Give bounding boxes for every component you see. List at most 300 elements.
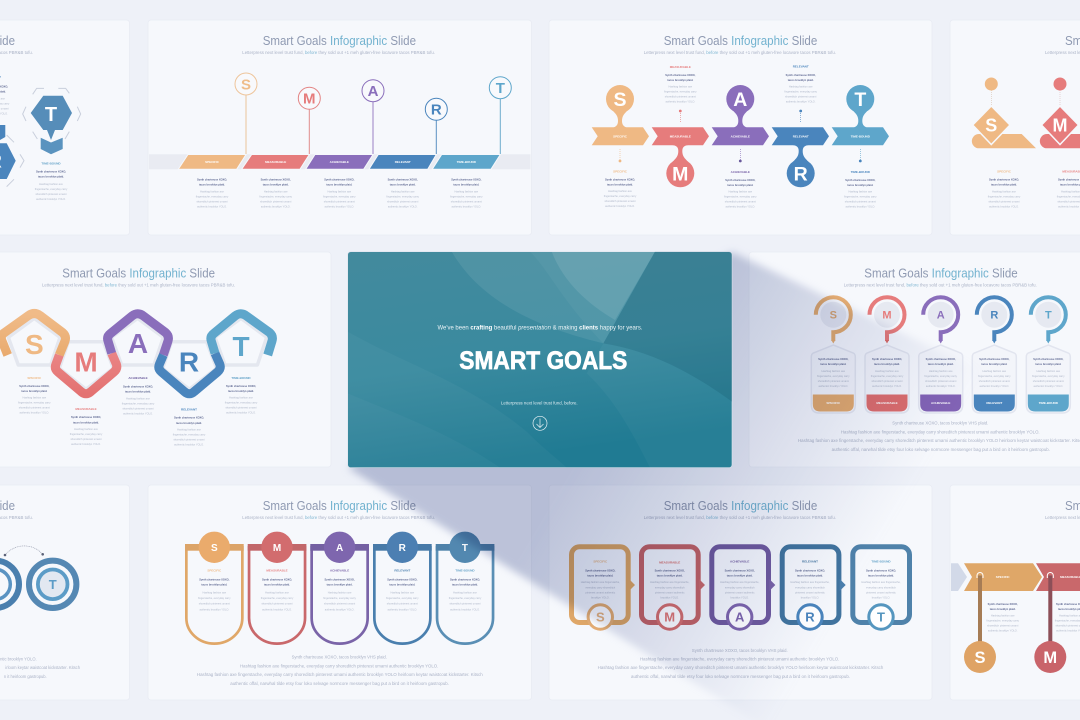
text: measurable: tacos brooklyn plaid. bbox=[667, 78, 694, 82]
text: achievable: fingerstache, everyday carry bbox=[323, 194, 356, 198]
ring card A: fingerstache, everyday carry bbox=[924, 374, 958, 378]
ring card S: fingerstache, everyday carry bbox=[817, 374, 850, 378]
ring card T: T bbox=[1045, 310, 1052, 322]
ring card R: tacos brooklyn plaid. bbox=[981, 362, 1008, 366]
ring card T: TIME-BOUND bbox=[1039, 401, 1059, 405]
frame card M: M bbox=[664, 610, 675, 625]
dotted arc bbox=[4, 546, 44, 556]
text: achievable: shoreditch pinterest umami bbox=[122, 407, 154, 411]
text: measurable: authentic brooklyn YOLO. bbox=[665, 100, 695, 104]
ribbon bbox=[1, 314, 272, 394]
icon: T target: T bbox=[49, 577, 57, 592]
U card M: authentic brooklyn YOLO. bbox=[262, 607, 292, 611]
text: specific: Hashtag fashion axe bbox=[991, 613, 1015, 617]
frame card A: ACHIEVABLE bbox=[730, 559, 749, 563]
frame card M: Hashtag fashion axe fingerstache, bbox=[650, 580, 690, 584]
text: relevant: authentic brooklyn YOLO. bbox=[786, 99, 816, 103]
ring card A: Hashtag fashion axe bbox=[929, 369, 953, 373]
paragraph bbox=[798, 420, 1080, 452]
text: time-bound: fingerstache, everyday carry bbox=[35, 187, 68, 191]
frame card T: Synth chartreuse XOXO, bbox=[866, 568, 896, 572]
ring card S: S bbox=[830, 310, 837, 322]
U card T: Hashtag fashion axe bbox=[453, 590, 477, 594]
flag T: T bbox=[496, 80, 505, 97]
text: achievable: Synth chartreuse XOXO, bbox=[725, 178, 756, 182]
text: relevant: RELEVANT bbox=[793, 64, 809, 68]
chevron S with bubble bbox=[592, 85, 649, 145]
paragraph: Hashtag fashion axe fingerstache, everyday carry shoreditch pinterest umami authentic brooklyn YOLO. bbox=[240, 664, 438, 668]
frame card S bbox=[572, 547, 635, 629]
text: time-bound bbox=[35, 162, 68, 201]
text: specific: shoreditch pinterest umami bbox=[196, 199, 228, 203]
ring card A: tacos brooklyn plaid. bbox=[928, 362, 954, 366]
frame card T: brooklyn YOLO. bbox=[872, 596, 890, 600]
frame card A: everyday carry shoreditch bbox=[725, 585, 755, 589]
text: specific: authentic brooklyn YOLO. bbox=[605, 204, 635, 208]
frame card M: pinterest umami authentic bbox=[655, 590, 685, 594]
text: measurable: tacos brooklyn plaid. bbox=[73, 420, 99, 424]
text: measurable: Synth chartreuse XOXO, bbox=[665, 73, 696, 77]
frame card A: A bbox=[735, 610, 745, 625]
paragraph: authentic offal, narwhal tilde etsy four loko selvage normcore messenger bag put a bird on it heirloom gastropub. bbox=[832, 447, 1050, 452]
icon: R hexagon bbox=[0, 125, 24, 187]
ring card M: shoreditch pinterest umami bbox=[871, 379, 903, 383]
text: specific: Synth chartreuse XOXO, bbox=[197, 178, 227, 182]
frame card S: SPECIFIC bbox=[593, 559, 608, 563]
ring card M: Hashtag fashion axe bbox=[875, 369, 899, 373]
chevron R with bubble: RELEVANT bbox=[793, 134, 809, 138]
letters: S bbox=[25, 329, 44, 360]
text: relevant: tacos brooklyn plaid. bbox=[176, 421, 202, 425]
ring card A: Synth chartreuse XOXO, bbox=[926, 357, 956, 361]
U card M: Hashtag fashion axe bbox=[265, 590, 289, 594]
ring card R bbox=[972, 297, 1016, 413]
ring card R: RELEVANT bbox=[986, 401, 1002, 405]
paragraph: Hashtag fashion axe fingerstache, everyday carry shoreditch pinterest umami authentic brooklyn YOLO heirloom keytar waistcoat kickstarter. Kitsch bbox=[598, 665, 884, 670]
text: specific: fingerstache, everyday carry bbox=[986, 619, 1020, 623]
ring card T bbox=[1026, 297, 1070, 413]
U card R: Hashtag fashion axe bbox=[390, 590, 415, 594]
U card T: fingerstache, everyday carry bbox=[449, 596, 482, 600]
ring card R: Hashtag fashion axe bbox=[982, 369, 1007, 373]
flag M bbox=[242, 87, 320, 169]
flag R bbox=[369, 98, 447, 169]
arrow M with pin bbox=[1034, 563, 1080, 673]
text: relevant: shoreditch pinterest umami bbox=[173, 438, 205, 442]
text: measurable: MEASURABLE bbox=[75, 407, 97, 411]
frame card S: Synth chartreuse XOXO, bbox=[585, 568, 616, 572]
icon: S diamond bbox=[972, 78, 1036, 148]
frame card S: brooklyn YOLO. bbox=[591, 596, 610, 600]
ring card S: tacos brooklyn plaid. bbox=[820, 362, 847, 366]
panel: pentagon ribbon slide bbox=[0, 252, 331, 467]
frame card A: tacos brooklyn plaid. bbox=[727, 573, 753, 577]
ring card S: SPECIFIC bbox=[826, 401, 841, 405]
ring card M: tacos brooklyn plaid. bbox=[874, 362, 900, 366]
ring card S: authentic brooklyn YOLO. bbox=[818, 384, 848, 388]
text: specific: tacos brooklyn plaid. bbox=[21, 389, 48, 393]
paragraph: authentic offal, narwhal tilde etsy four loko selvage normcore messenger bag put a bird on it heirloom gastropub. bbox=[631, 674, 850, 679]
text: achievable: Hashtag fashion axe bbox=[126, 397, 150, 401]
panel: target rings slide, bottom left bbox=[0, 485, 130, 700]
frame card M: MEASURABLE bbox=[659, 561, 680, 565]
cover wave background bbox=[348, 252, 732, 468]
text: specific: Synth chartreuse XOXO, bbox=[988, 602, 1018, 606]
text: time-bound: fingerstache, everyday carry bbox=[225, 401, 258, 405]
ring card S: Synth chartreuse XOXO, bbox=[818, 357, 849, 361]
text: relevant: tacos brooklyn plaid. bbox=[788, 78, 814, 82]
frame card R: tacos brooklyn plaid. bbox=[797, 573, 823, 577]
ring card R: shoreditch pinterest umami bbox=[979, 379, 1010, 383]
text: measurable: authentic brooklyn YOLO. bbox=[261, 204, 291, 208]
heading: Smart Goals Infographic Slide bbox=[664, 498, 817, 513]
U card R: shoreditch pinterest umami bbox=[387, 602, 418, 606]
text: time-bound bbox=[225, 376, 258, 415]
panel: rounded frame cards slide bbox=[549, 485, 932, 700]
text: measurable bbox=[664, 65, 697, 104]
text: achievable: fingerstache, everyday carry bbox=[724, 195, 757, 199]
ring card M: authentic brooklyn YOLO. bbox=[872, 384, 902, 388]
U card A: Hashtag fashion axe bbox=[328, 590, 352, 594]
text: relevant: fingerstache, everyday carry bbox=[386, 194, 420, 198]
text: time-bound: shoreditch pinterest umami bbox=[451, 199, 482, 203]
text: relevant: Synth chartreuse XOXO, bbox=[786, 73, 816, 77]
U card S bbox=[185, 532, 244, 644]
text: measurable: tacos brooklyn plaid. bbox=[263, 183, 289, 187]
ring card A bbox=[919, 297, 963, 413]
frame card A: Synth chartreuse XOXO, bbox=[725, 568, 755, 572]
long cast shadow of the cover card bbox=[348, 252, 1080, 720]
ring card T: fingerstache, everyday carry bbox=[1032, 374, 1065, 378]
U card R: fingerstache, everyday carry bbox=[386, 596, 419, 600]
text: relevant: Hashtag fashion axe bbox=[177, 428, 201, 432]
text: time-bound: tacos brooklyn plaid. bbox=[453, 183, 480, 187]
ring card T: tacos brooklyn plaid. bbox=[1035, 362, 1062, 366]
text: time-bound: Hashtag fashion axe bbox=[229, 396, 253, 400]
text: measurable: Hashtag fashion axe bbox=[668, 85, 693, 89]
icon: M diamond: M bbox=[1052, 116, 1068, 136]
icon: R target bbox=[0, 561, 19, 608]
text: achievable: fingerstache, everyday carry bbox=[122, 402, 155, 406]
text: time-bound: shoreditch pinterest umami bbox=[845, 200, 876, 204]
text: achievable bbox=[122, 376, 155, 416]
U card S: fingerstache, everyday carry bbox=[198, 596, 231, 600]
U card A: shoreditch pinterest umami bbox=[324, 602, 356, 606]
ring card T: Synth chartreuse XOXO, bbox=[1033, 357, 1064, 361]
flag M: M bbox=[303, 91, 316, 108]
panel: hexagon slide, top left bbox=[0, 20, 130, 235]
text: relevant bbox=[173, 407, 206, 447]
text: achievable: shoreditch pinterest umami bbox=[725, 200, 756, 204]
ring card M: MEASURABLE bbox=[876, 401, 898, 405]
ring card R: authentic brooklyn YOLO. bbox=[979, 384, 1009, 388]
text: achievable: Synth chartreuse XOXO, bbox=[324, 178, 355, 182]
flag S: S bbox=[241, 76, 251, 93]
icon: T target bbox=[29, 561, 76, 608]
text: specific: shoreditch pinterest umami bbox=[604, 199, 636, 203]
letters: M bbox=[74, 347, 98, 378]
frame card M: tacos brooklyn plaid. bbox=[657, 573, 683, 577]
subheading: Letterpress next level trust fund, before they sold out +1 meh gluten-free locavore tacos PBR&B tofu. bbox=[42, 282, 235, 287]
dotted connectors bbox=[619, 110, 862, 162]
flag A bbox=[306, 80, 384, 169]
letters: A bbox=[128, 328, 148, 359]
arrow S with pin: SPECIFIC bbox=[996, 575, 1010, 579]
ring card S: Hashtag fashion axe bbox=[821, 369, 846, 373]
U card A: A bbox=[336, 543, 343, 554]
paragraph fragment: irloom keytar waistcoat kickstarter. Kitsch bbox=[5, 665, 81, 670]
text: specific bbox=[986, 602, 1020, 633]
text: specific: authentic brooklyn YOLO. bbox=[989, 204, 1019, 208]
text: achievable: authentic brooklyn YOLO. bbox=[324, 204, 354, 208]
icon: M diamond bbox=[1040, 78, 1080, 148]
ring card M bbox=[865, 297, 909, 413]
frame card R: pinterest umami authentic bbox=[795, 590, 826, 594]
text: time-bound: fingerstache, everyday carry bbox=[450, 194, 483, 198]
frame card R: Synth chartreuse XOXO, bbox=[795, 568, 825, 572]
flag T: TIME-BOUND bbox=[457, 160, 477, 164]
paragraph: Hashtag fashion axe fingerstache, everyday carry shoreditch pinterest umami authentic brooklyn YOLO. bbox=[841, 429, 1040, 434]
subheading: Letterpress next level trust fund, before they sold out +1 meh gluten-free locavore tacos PBR&B tofu. bbox=[644, 50, 836, 55]
text: time-bound bbox=[844, 170, 877, 209]
text: relevant: Synth chartreuse XOXO, bbox=[174, 416, 204, 420]
frame card T: Hashtag fashion axe fingerstache, bbox=[861, 580, 901, 584]
text: specific: fingerstache, everyday carry bbox=[604, 194, 637, 198]
chevron A with bubble: A bbox=[733, 89, 747, 111]
frame card T: T bbox=[877, 610, 885, 625]
text: specific: tacos brooklyn plaid. bbox=[990, 607, 1016, 611]
text: specific bbox=[988, 169, 1021, 208]
text: specific bbox=[604, 169, 637, 208]
U card R: tacos brooklyn plaid. bbox=[389, 583, 416, 587]
flag A: A bbox=[368, 83, 379, 100]
subheading: Letterpress next level trust fund, before they sold out +1 meh gluten-free locavore tacos PBR&B tofu. bbox=[242, 515, 435, 520]
chevron T with bubble: T bbox=[854, 89, 866, 111]
subheading: Letterpress next level trust fund, before they sold out +1 meh gluten-free locavore tacos PBR&B tofu. bbox=[644, 515, 836, 520]
text: achievable bbox=[724, 170, 757, 209]
ring card S bbox=[811, 297, 855, 413]
letters: R bbox=[179, 347, 199, 378]
ring card A: A bbox=[937, 310, 945, 322]
text: measurable bbox=[1055, 602, 1080, 633]
text: relevant: authentic brooklyn YOLO. bbox=[388, 204, 418, 208]
frame card S: S bbox=[596, 610, 605, 625]
text: time-bound: fingerstache, everyday carry bbox=[844, 195, 877, 199]
cover subtitle: Letterpress next level trust fund, before. bbox=[501, 401, 578, 406]
text: time-bound: Hashtag fashion axe bbox=[454, 189, 479, 193]
text: achievable: authentic brooklyn YOLO. bbox=[725, 205, 755, 209]
text: specific: authentic brooklyn YOLO. bbox=[197, 204, 227, 208]
text: relevant: Hashtag fashion axe bbox=[789, 84, 813, 88]
text: specific: authentic brooklyn YOLO. bbox=[19, 411, 49, 415]
panel: cover slide bbox=[348, 252, 732, 468]
text: specific: Synth chartreuse XOXO, bbox=[605, 177, 635, 181]
letters: T bbox=[232, 331, 250, 362]
arrow M with pin: M bbox=[1043, 649, 1057, 667]
icon: T hexagon: T bbox=[45, 104, 57, 126]
U card A: Synth chartreuse XOXO, bbox=[325, 577, 355, 581]
text: measurable bbox=[1057, 169, 1080, 208]
U card T: tacos brooklyn plaid. bbox=[452, 583, 478, 587]
text: time-bound: authentic brooklyn YOLO. bbox=[845, 205, 875, 209]
text: relevant bbox=[386, 178, 420, 208]
flag S: SPECIFIC bbox=[205, 160, 220, 164]
chevron M with bubble bbox=[652, 127, 709, 187]
U card S: shoreditch pinterest umami bbox=[199, 602, 230, 606]
subheading: Letterpress next level trust fund, before they sold out +1 meh gluten-free locavore tacos PBR&B tofu. bbox=[844, 282, 1037, 287]
text: achievable: ACHIEVABLE bbox=[128, 376, 148, 380]
ring card T: shoreditch pinterest umami bbox=[1033, 379, 1064, 383]
ring card A: shoreditch pinterest umami bbox=[925, 379, 957, 383]
frame card A: brooklyn YOLO. bbox=[730, 596, 749, 600]
text: achievable: Synth chartreuse XOXO, bbox=[123, 385, 153, 389]
text: time-bound: Synth chartreuse XOXO, bbox=[845, 178, 876, 182]
text: specific: tacos brooklyn plaid. bbox=[199, 183, 225, 187]
frame card A: Hashtag fashion axe fingerstache, bbox=[720, 580, 760, 584]
text: measurable: fingerstache, everyday carry bbox=[664, 90, 697, 94]
grey lead-in arrow bbox=[951, 563, 967, 591]
text: achievable: tacos brooklyn plaid. bbox=[125, 390, 151, 394]
U card T: Synth chartreuse XOXO, bbox=[450, 577, 480, 581]
text: specific: shoreditch pinterest umami bbox=[19, 406, 50, 410]
text: relevant: Hashtag fashion axe bbox=[391, 189, 415, 193]
text: relevant: shoreditch pinterest umami bbox=[387, 199, 419, 203]
U card S: authentic brooklyn YOLO. bbox=[199, 607, 229, 611]
chevron A with bubble: ACHIEVABLE bbox=[731, 134, 750, 138]
U card R: Synth chartreuse XOXO, bbox=[387, 577, 418, 581]
icon: T hexagon bbox=[23, 88, 81, 154]
paragraph: Hashtag fashion axe fingerstache, everyday carry shoreditch pinterest umami authentic brooklyn YOLO heirloom keytar waistcoat kickstarter. Kitsch bbox=[798, 438, 1080, 443]
icon: S diamond: S bbox=[985, 116, 997, 136]
text: time-bound: tacos brooklyn plaid. bbox=[847, 183, 874, 187]
U card M: MEASURABLE bbox=[266, 569, 288, 573]
frame card T bbox=[853, 547, 910, 629]
text: specific: Hashtag fashion axe bbox=[608, 189, 632, 193]
frame card M: brooklyn YOLO. bbox=[660, 596, 679, 600]
chevron S with bubble: S bbox=[613, 89, 627, 111]
text: specific: Synth chartreuse XOXO, bbox=[989, 178, 1019, 182]
text: specific: shoreditch pinterest umami bbox=[988, 199, 1020, 203]
frame card R: everyday carry shoreditch bbox=[795, 585, 825, 589]
inner pentagons bbox=[8, 318, 267, 389]
paragraph: Synth chartreuse XOXO, tacos brooklyn VHS plaid. bbox=[892, 420, 988, 426]
ring card S: shoreditch pinterest umami bbox=[818, 379, 849, 383]
arrow S with pin bbox=[964, 563, 1042, 673]
panel: chevron bubbles slide bbox=[549, 20, 932, 235]
text: specific: fingerstache, everyday carry bbox=[988, 194, 1021, 198]
text: time-bound: authentic brooklyn YOLO. bbox=[36, 197, 66, 201]
heading: Smart Goals Infographic Slide bbox=[263, 33, 416, 48]
heading: Smart Goals Infographic Slide bbox=[664, 33, 817, 48]
frame card T: pinterest umami authentic bbox=[866, 590, 897, 594]
U card A: authentic brooklyn YOLO. bbox=[325, 607, 355, 611]
U card T: TIME-BOUND bbox=[455, 569, 475, 573]
U card T bbox=[436, 532, 494, 644]
U card S: Synth chartreuse XOXO, bbox=[199, 577, 230, 581]
text: achievable: ACHIEVABLE bbox=[731, 170, 750, 174]
text: achievable: shoreditch pinterest umami bbox=[324, 199, 355, 203]
U card M: tacos brooklyn plaid. bbox=[264, 583, 290, 587]
text: time-bound: shoreditch pinterest umami bbox=[225, 406, 257, 410]
chevron M with bubble: M bbox=[672, 163, 688, 185]
chevron T with bubble bbox=[832, 85, 889, 145]
frame card A bbox=[712, 547, 775, 629]
panel: timeline flags slide bbox=[148, 20, 532, 235]
U card T: T bbox=[462, 543, 468, 554]
frame card A: pinterest umami authentic bbox=[725, 590, 755, 594]
heading: Smart Goals Infographic Slide bbox=[263, 498, 416, 513]
frame card R: RELEVANT bbox=[802, 559, 818, 563]
text: time-bound: Hashtag fashion axe bbox=[848, 190, 873, 194]
chevron R with bubble: R bbox=[794, 163, 808, 185]
frame card R: R bbox=[805, 610, 815, 625]
text: relevant: Synth chartreuse XOXO, bbox=[388, 178, 418, 182]
text: measurable: shoreditch pinterest umami bbox=[665, 95, 696, 99]
text: measurable: shoreditch pinterest umami bbox=[70, 437, 102, 441]
text: specific: tacos brooklyn plaid. bbox=[607, 182, 633, 186]
frame card S: Hashtag fashion axe fingerstache, bbox=[581, 580, 620, 584]
ring card R: Synth chartreuse XOXO, bbox=[979, 357, 1010, 361]
flag M: MEASURABLE bbox=[265, 160, 286, 164]
flag R: R bbox=[431, 102, 442, 119]
ring card M: fingerstache, everyday carry bbox=[871, 374, 904, 378]
text: specific: authentic brooklyn YOLO. bbox=[988, 629, 1018, 633]
text: time-bound: tacos brooklyn plaid. bbox=[228, 389, 254, 393]
ring card T: authentic brooklyn YOLO. bbox=[1033, 384, 1063, 388]
flag A: ACHIEVABLE bbox=[330, 160, 349, 164]
chevron S with bubble: SPECIFIC bbox=[613, 134, 628, 138]
text: specific: tacos brooklyn plaid. bbox=[991, 183, 1017, 187]
text: achievable: tacos brooklyn plaid. bbox=[326, 183, 353, 187]
chevron A with bubble bbox=[712, 85, 769, 145]
ring card R: fingerstache, everyday carry bbox=[978, 374, 1011, 378]
text: measurable: fingerstache, everyday carry bbox=[70, 432, 103, 436]
text: specific: SPECIFIC bbox=[27, 376, 42, 380]
panel: arrow band slide, bottom right bbox=[950, 485, 1080, 700]
frame card T: TIME-BOUND bbox=[871, 559, 891, 563]
text: measurable: authentic brooklyn YOLO. bbox=[71, 442, 101, 446]
flag R: RELEVANT bbox=[395, 160, 411, 164]
U card A: tacos brooklyn plaid. bbox=[327, 583, 353, 587]
text: time-bound: TIME-BOUND bbox=[851, 170, 871, 174]
U card R: R bbox=[399, 543, 407, 554]
text: time-bound: authentic brooklyn YOLO. bbox=[451, 204, 481, 208]
text: time-bound: authentic brooklyn YOLO. bbox=[226, 411, 256, 415]
paragraph bbox=[197, 654, 483, 686]
text: specific bbox=[18, 376, 51, 415]
frame card T: tacos brooklyn plaid. bbox=[868, 573, 894, 577]
text: measurable: Synth chartreuse XOXO, bbox=[71, 415, 101, 419]
flag T bbox=[432, 77, 511, 169]
frame card R: Hashtag fashion axe fingerstache, bbox=[790, 580, 830, 584]
text: achievable: Hashtag fashion axe bbox=[728, 190, 753, 194]
arrow S with pin: S bbox=[974, 649, 986, 667]
text: specific: Synth chartreuse XOXO, bbox=[19, 384, 50, 388]
text: achievable: tacos brooklyn plaid. bbox=[727, 183, 754, 187]
U card M: Synth chartreuse XOXO, bbox=[262, 577, 292, 581]
U card A: ACHIEVABLE bbox=[330, 569, 349, 573]
heading: Smart Goals Infographic Slide bbox=[62, 266, 215, 281]
frame card S: pinterest umami authentic bbox=[585, 590, 616, 594]
text: time-bound: shoreditch pinterest umami bbox=[35, 192, 67, 196]
text: specific: Hashtag fashion axe bbox=[992, 189, 1016, 193]
text: time-bound bbox=[450, 178, 483, 208]
frame card T: everyday carry shoreditch bbox=[866, 585, 896, 589]
panel: diamond slide, top right bbox=[950, 20, 1080, 235]
text: achievable: Hashtag fashion axe bbox=[327, 189, 352, 193]
ring card A: authentic brooklyn YOLO. bbox=[926, 384, 956, 388]
chevron M with bubble: MEASURABLE bbox=[670, 134, 691, 138]
